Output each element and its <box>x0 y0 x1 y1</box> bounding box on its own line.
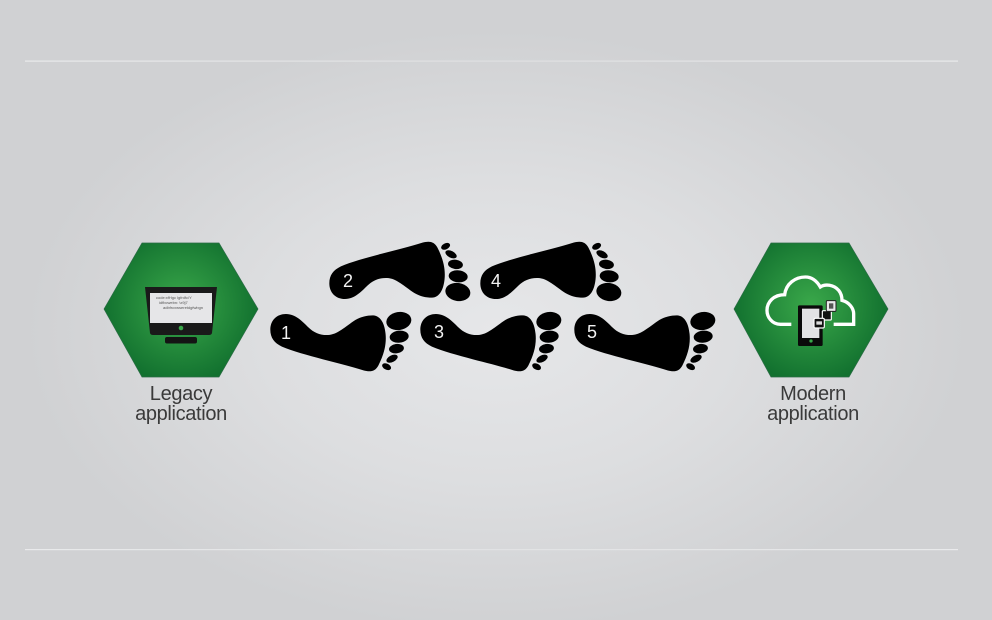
label: legacy application: Legacy <box>150 383 213 405</box>
footprint 2 <box>329 241 472 303</box>
footprint 1 <box>270 310 413 372</box>
icon: monitor with code: idfbcwebn: \x9j7 <box>159 300 188 305</box>
label: legacy application: application <box>135 403 227 425</box>
label: modern application: Modern <box>780 383 846 405</box>
footprint 3: 3 <box>434 322 444 342</box>
hexagon: modern <box>734 243 888 377</box>
footprint 5 <box>574 310 717 372</box>
footprint 4 <box>480 241 623 303</box>
legacy application group <box>104 243 258 425</box>
footprint 4: 4 <box>491 271 501 291</box>
footsteps <box>270 241 717 372</box>
footprint 1: 1 <box>281 323 291 343</box>
icon: monitor with code: adbfrcxwseretdgfwbgn <box>163 305 203 310</box>
icon: cloud with phone <box>767 277 854 346</box>
hexagon: legacy <box>104 243 258 377</box>
footprint 3 <box>420 310 563 372</box>
icon: monitor with code: code:xfHgc lgfrdfc/Y <box>156 295 192 300</box>
modern application group <box>734 243 888 425</box>
footprint 2: 2 <box>343 271 353 291</box>
icon: monitor with code <box>145 287 217 344</box>
footprint 5: 5 <box>587 322 597 342</box>
label: modern application: application <box>767 403 859 425</box>
